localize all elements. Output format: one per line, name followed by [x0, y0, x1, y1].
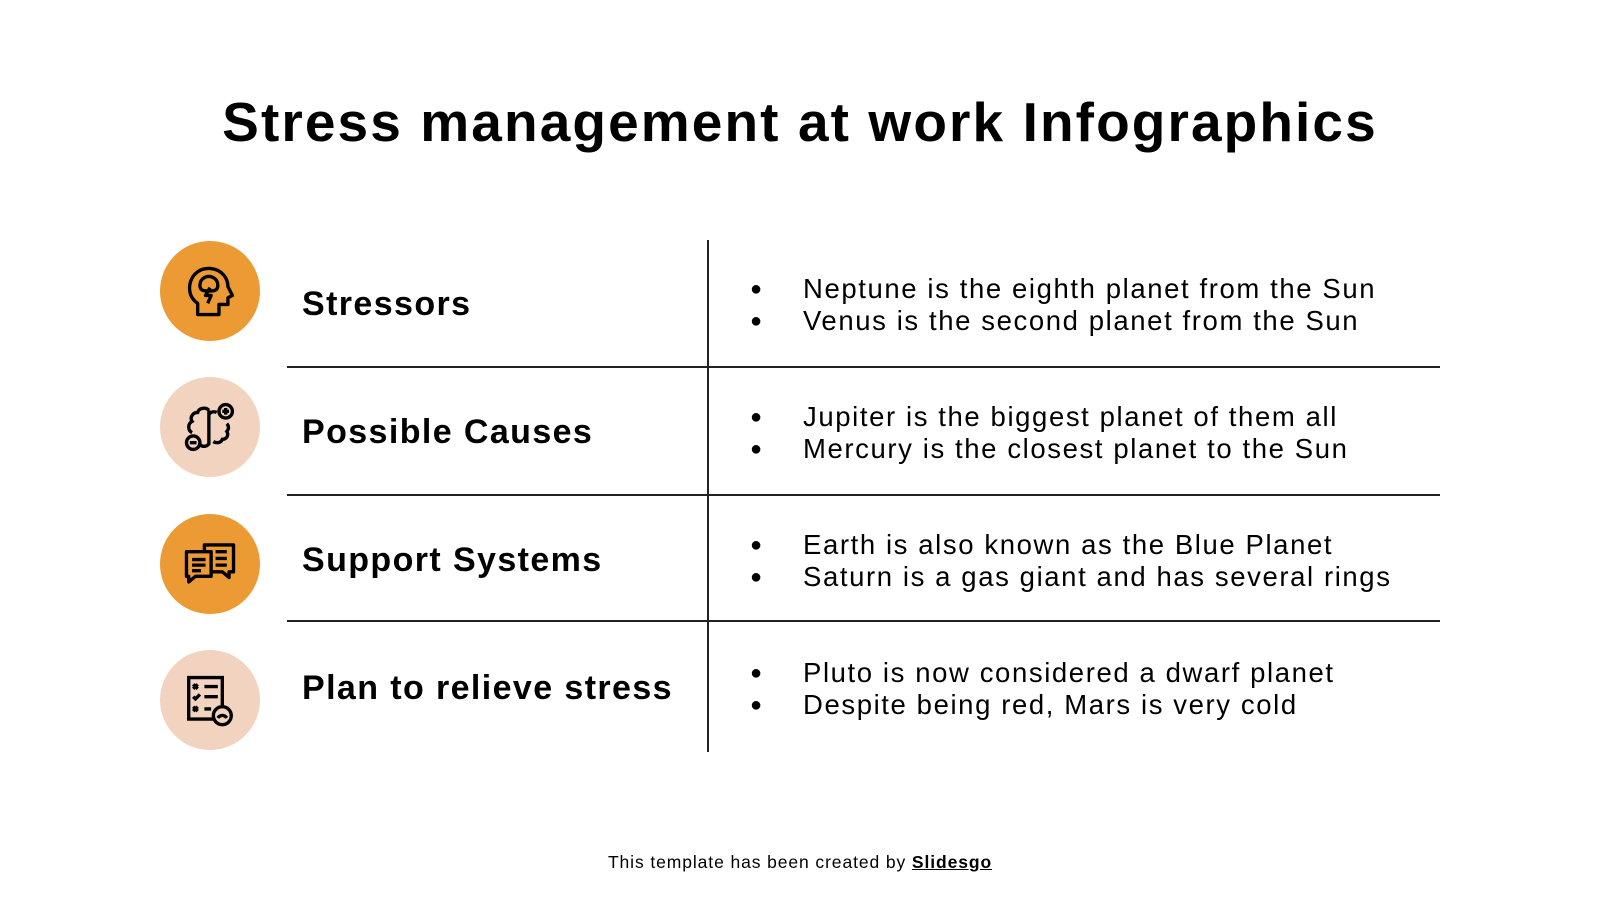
icon: brain plus minus — [160, 377, 260, 477]
bullets 3 — [752, 529, 1392, 592]
vertical divider — [707, 240, 709, 752]
bullets 3: Earth is also known as the Blue Planet — [803, 529, 1333, 560]
bullets 2: Jupiter is the biggest planet of them all — [803, 401, 1338, 432]
label: Stressors: Stressors — [302, 285, 471, 323]
icon: head with lightning — [160, 241, 260, 341]
footer credit: This template has been created by Slidesgo — [608, 852, 992, 872]
bullets 4: Despite being red, Mars is very cold — [803, 689, 1298, 720]
bullets 4: Pluto is now considered a dwarf planet — [803, 657, 1335, 688]
title: Stress management at work Infographics — [222, 91, 1378, 153]
bullets 1: Neptune is the eighth planet from the Sun — [803, 273, 1376, 304]
label: Possible Causes: Possible Causes — [302, 413, 593, 451]
bullets 2: Mercury is the closest planet to the Sun — [803, 433, 1348, 464]
label: Plan to relieve stress: Plan to relieve stress — [302, 669, 673, 707]
bullets 1 — [752, 273, 1376, 336]
bullets 2 — [752, 401, 1348, 464]
icon: checklist — [160, 650, 260, 750]
icon: chat documents — [160, 514, 260, 614]
bullets 4 — [752, 657, 1335, 720]
bullets 1: Venus is the second planet from the Sun — [803, 305, 1359, 336]
label: Support Systems: Support Systems — [302, 541, 603, 579]
bullets 3: Saturn is a gas giant and has several rings — [803, 561, 1392, 592]
